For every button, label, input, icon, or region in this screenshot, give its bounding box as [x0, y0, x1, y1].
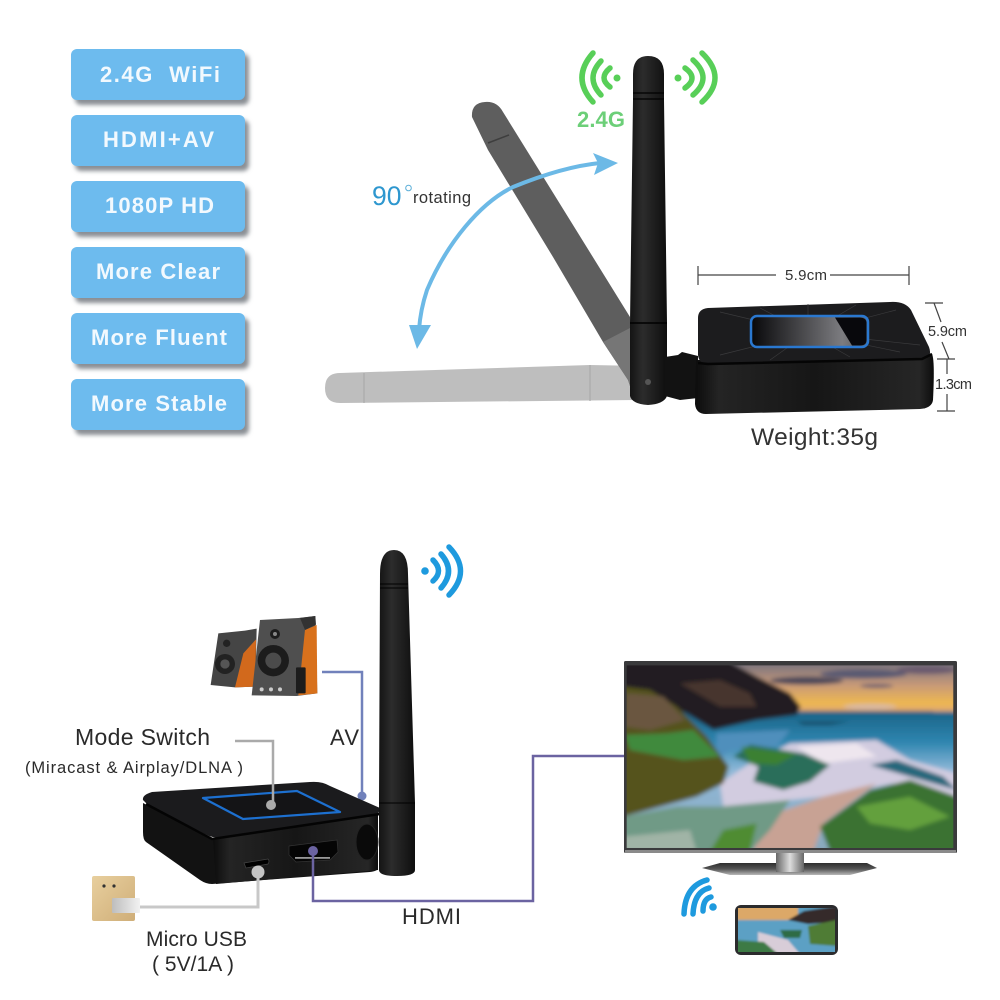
button: 1080P HD: 1080P HD [105, 193, 214, 218]
antenna ghost: diagonal position [472, 102, 632, 392]
icon: blue wifi top [421, 547, 460, 595]
icon: blue wifi bottom [684, 880, 717, 914]
icon: green wifi left [582, 53, 620, 102]
bottom antenna [379, 550, 415, 876]
label: AV: AV [330, 725, 359, 750]
dimension: depth 5.9cm: 5.9cm [928, 324, 967, 340]
dimension: width 5.9cm: 5.9cm [785, 267, 827, 284]
cable: mode switch pointer [235, 741, 276, 810]
button: More Fluent [71, 313, 249, 369]
label: mode list: (Miracast & Airplay/DLNA ) [25, 759, 243, 777]
dimension: height 1.3cm [935, 359, 972, 411]
cable: micro USB line and plug [112, 866, 264, 913]
dimension: height 1.3cm: 1.3cm [935, 377, 972, 393]
tv frame [624, 661, 957, 853]
tv stand [702, 852, 877, 875]
label: weight: Weight:35g [751, 424, 878, 451]
cable: AV line [322, 672, 366, 800]
icon: green wifi right [674, 53, 715, 102]
label: 5V/1A: ( 5V/1A ) [152, 953, 234, 976]
television [623, 661, 957, 875]
label: Mode Switch: Mode Switch [75, 724, 210, 750]
phone [735, 905, 838, 955]
button: More Stable [71, 379, 249, 435]
label: Micro USB: Micro USB [146, 928, 247, 951]
dongle screen [751, 316, 868, 347]
button: 1080P HD [71, 181, 249, 237]
panel: feature buttons [71, 49, 249, 435]
dimension: width 5.9cm [698, 266, 909, 285]
tv screen landscape [623, 662, 957, 852]
device screen [203, 791, 340, 819]
button: More Stable: More Stable [91, 391, 227, 416]
label: 2.4G: 2.4G [577, 107, 625, 132]
panel: connection diagram [25, 547, 957, 976]
dongle device angled view [143, 782, 380, 884]
button: HDMI+AV [71, 115, 249, 171]
port: HDMI [289, 840, 338, 862]
label: 90 degree rotating: 90 [372, 181, 401, 211]
button: HDMI+AV: HDMI+AV [103, 127, 214, 152]
button: 2.4G WiFi: 2.4G WiFi [100, 62, 220, 87]
dongle device top view [665, 302, 934, 414]
cable: HDMI line [308, 756, 624, 901]
label: 90 degree rotating [372, 181, 471, 211]
rotation arc arrow [409, 153, 618, 349]
button: More Clear [71, 247, 249, 303]
dimension: depth 5.9cm [925, 303, 967, 359]
button: More Clear: More Clear [96, 259, 220, 284]
button: 2.4G WiFi [71, 49, 249, 105]
button: More Fluent: More Fluent [91, 325, 228, 350]
wall socket [92, 876, 135, 921]
port: micro USB [244, 859, 269, 868]
antenna ghost: horizontal position [325, 365, 640, 403]
panel: rotating antenna product view [325, 53, 972, 451]
black antenna [630, 56, 667, 405]
speakers [211, 616, 317, 696]
tv bezel highlight [625, 850, 956, 853]
label: 90 degree rotating: rotating [413, 189, 471, 207]
label: HDMI: HDMI [402, 904, 461, 929]
